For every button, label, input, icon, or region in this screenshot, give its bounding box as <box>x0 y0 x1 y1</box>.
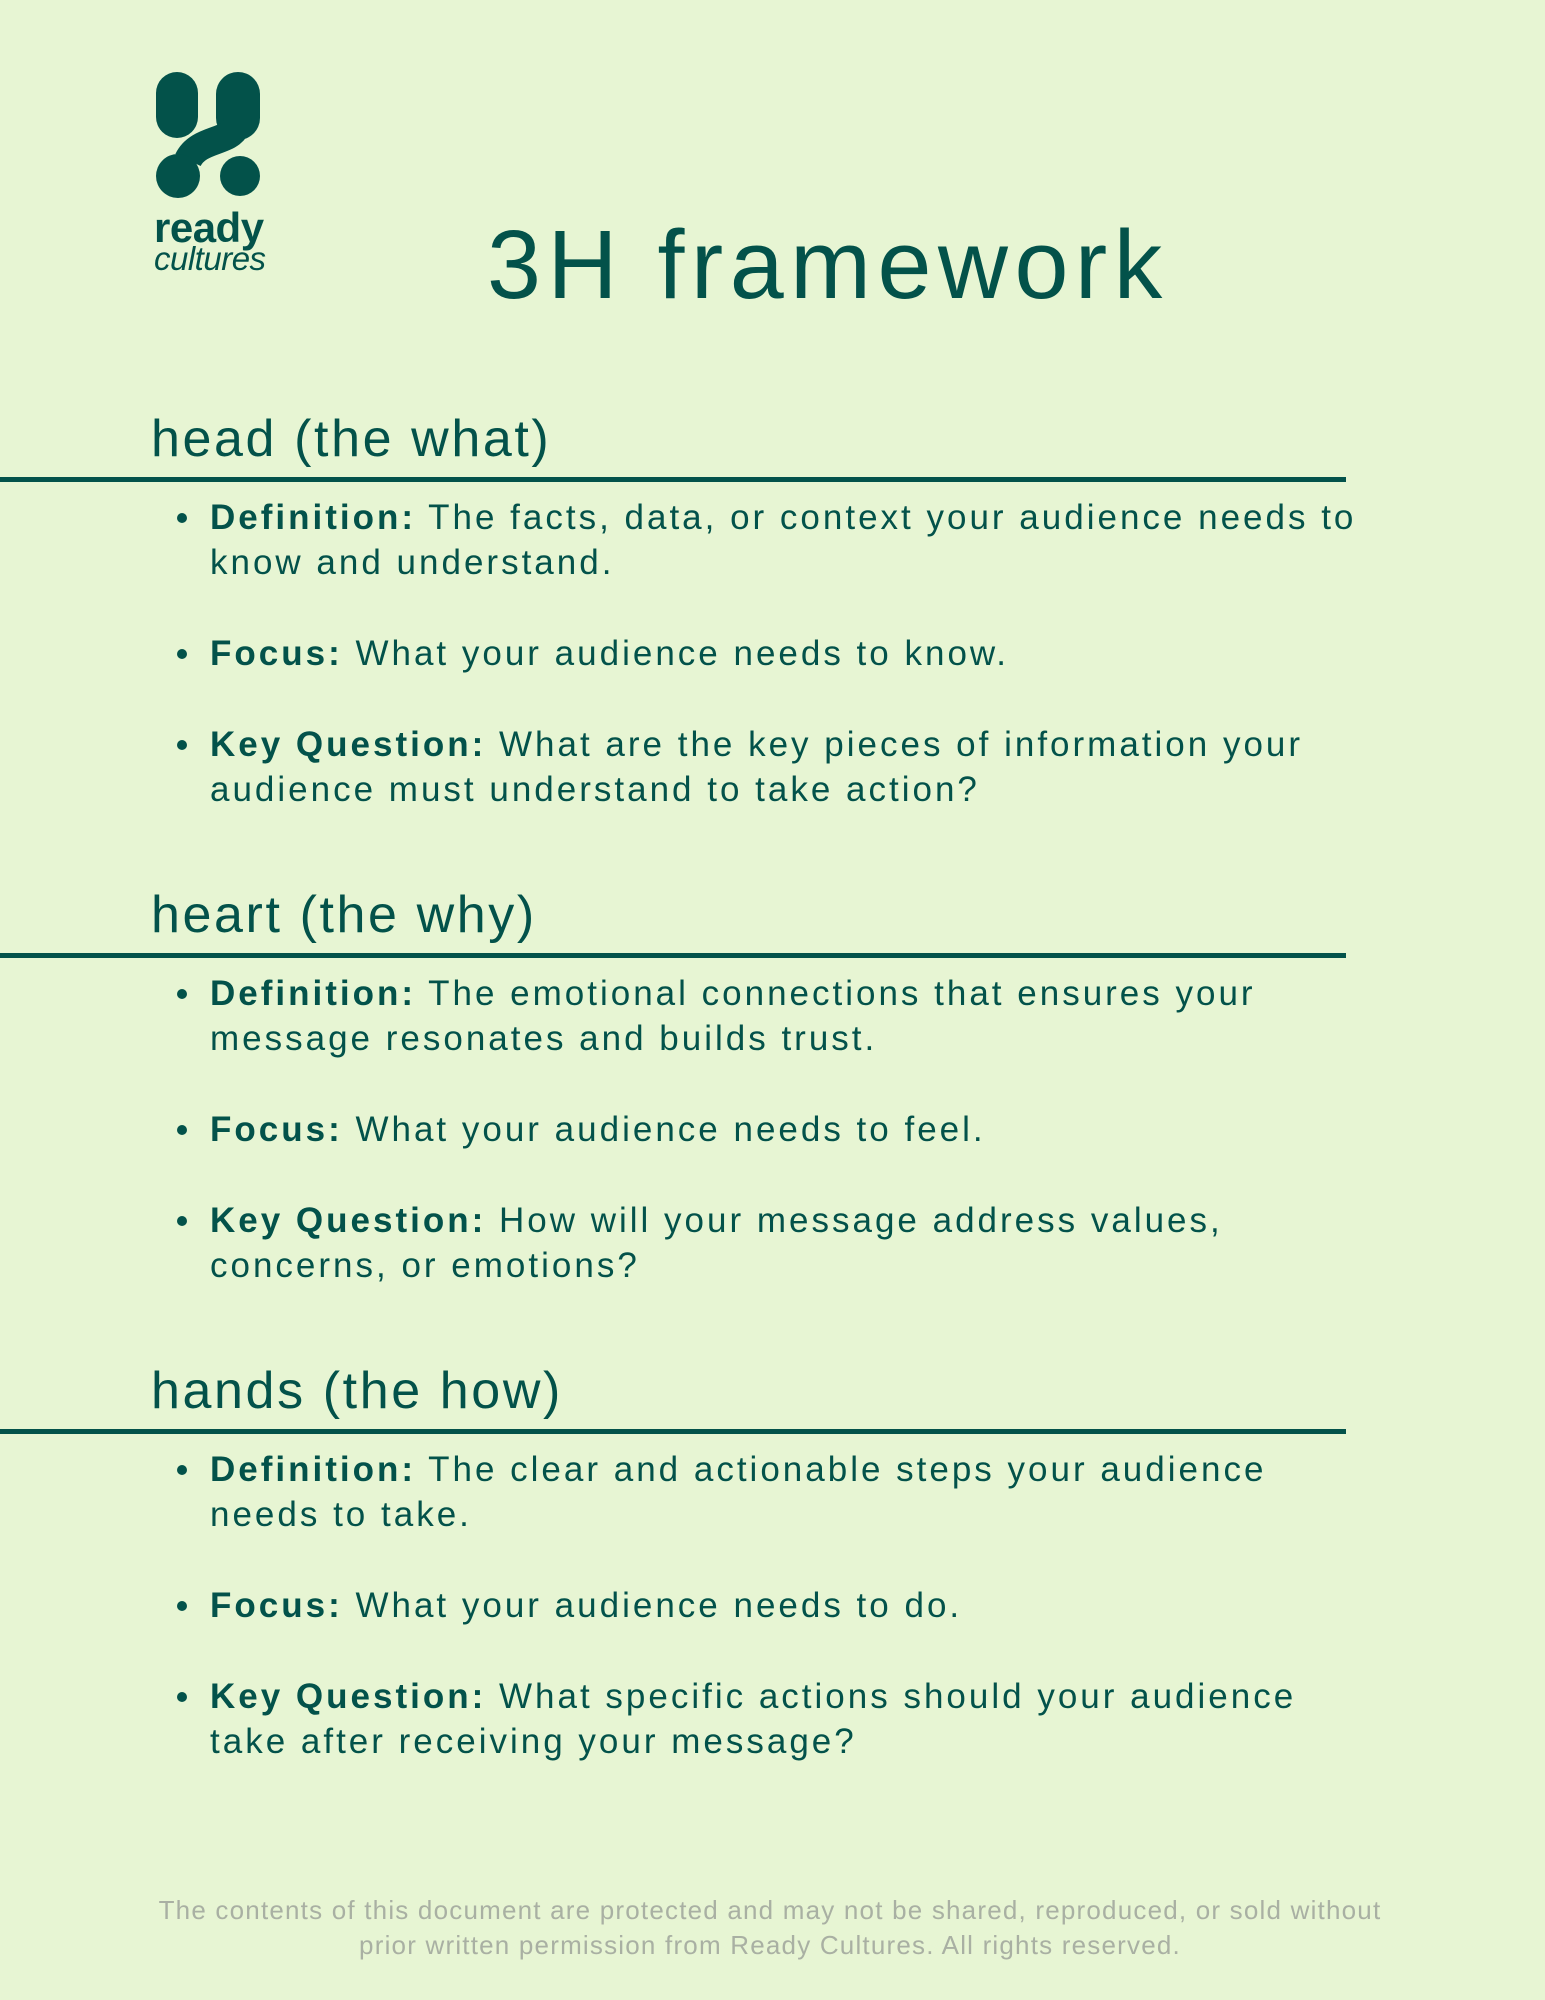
bullet: definition <box>177 971 1256 1061</box>
footer: prior written permission from Ready Cultures. All rights reserved. <box>359 1930 1181 1960</box>
section: hands <box>0 1362 1346 1761</box>
bullet: focus: Focus: What your audience needs to feel. <box>210 1110 986 1149</box>
bullet: focus: Focus: What your audience needs to do. <box>210 1586 962 1625</box>
bullet: focus: Focus: What your audience needs to know. <box>210 634 1009 673</box>
footer <box>159 1895 1381 1960</box>
bullet: key question: concerns, or emotions? <box>210 1246 640 1285</box>
bullet: key question: Key Question: How will your message address values, <box>210 1201 1223 1240</box>
title: 3H framework <box>487 210 1169 319</box>
bullet: key question: take after receiving your message? <box>210 1722 857 1761</box>
logo: cultures <box>154 240 266 277</box>
section: heart <box>0 886 1346 1285</box>
bullet: key question <box>177 722 1303 812</box>
bullet: definition: know and understand. <box>210 543 614 582</box>
heading: head: head (the what) <box>151 410 551 468</box>
bullet: definition: Definition: The clear and actionable steps your audience <box>210 1450 1266 1489</box>
footer: The contents of this document are protected and may not be shared, reproduced, or sold without <box>159 1895 1381 1925</box>
section: head <box>0 410 1356 809</box>
heading: hands: hands (the how) <box>151 1362 563 1420</box>
bullet: key question <box>177 1198 1223 1288</box>
bullet: definition <box>177 1447 1266 1537</box>
bullet: key question: Key Question: What are the key pieces of information your <box>210 725 1303 764</box>
bullet: key question: Key Question: What specific actions should your audience <box>210 1677 1296 1716</box>
bullet: key question <box>177 1674 1296 1764</box>
bullet: definition: Definition: The facts, data, or context your audience needs to <box>210 498 1356 537</box>
bullet: definition <box>177 495 1356 585</box>
bullet: definition: needs to take. <box>210 1495 472 1534</box>
logo <box>154 72 266 277</box>
bullet: definition: Definition: The emotional connections that ensures your <box>210 974 1256 1013</box>
bullet: key question: audience must understand to take action? <box>210 770 980 809</box>
heading: heart: heart (the why) <box>151 886 537 944</box>
bullet: definition: message resonates and builds trust. <box>210 1019 877 1058</box>
logo: ready <box>154 204 264 251</box>
